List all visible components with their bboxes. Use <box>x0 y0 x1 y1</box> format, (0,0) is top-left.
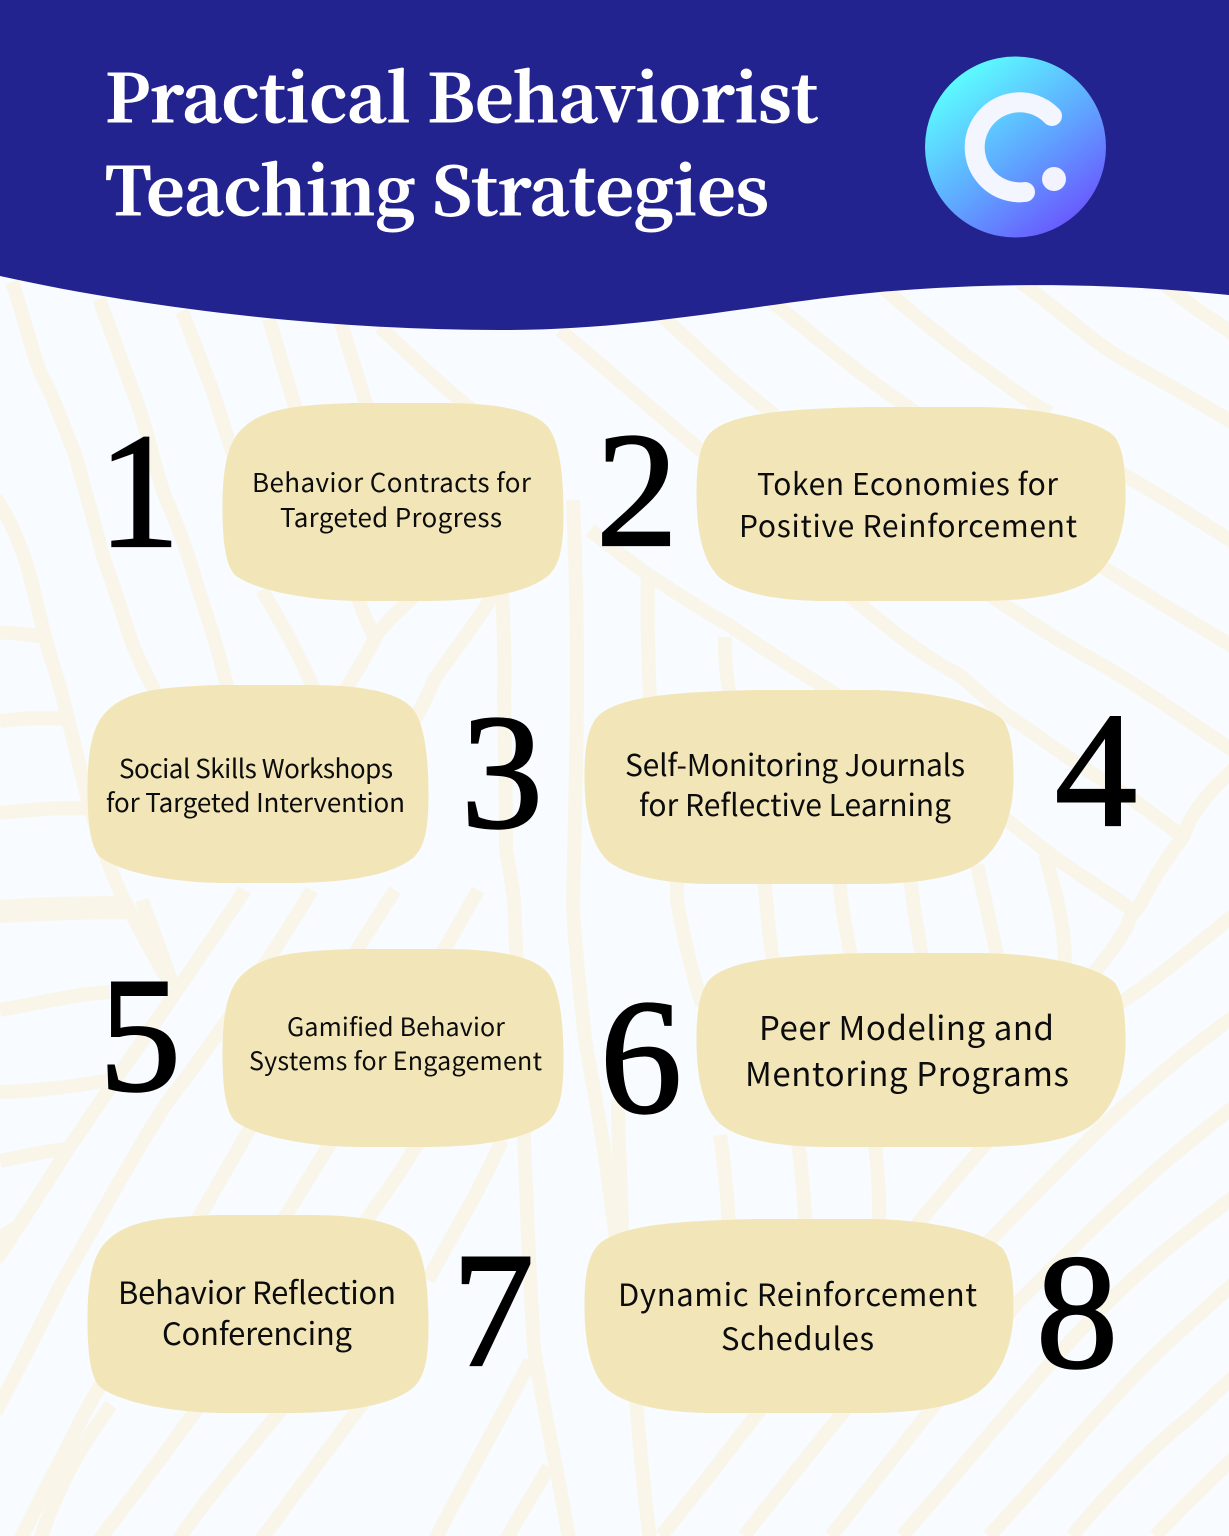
card 8: Dynamic Reinforcement <box>618 1270 977 1315</box>
number 4: 4 <box>1055 680 1137 861</box>
header banner <box>0 0 1229 330</box>
card 7: Behavior Reflection <box>118 1268 396 1313</box>
card 4 <box>584 690 1014 884</box>
card 3: Social Skills Workshops <box>119 749 393 786</box>
item 4 <box>584 680 1137 884</box>
number 3: 3 <box>461 682 543 863</box>
number 5: 5 <box>99 945 181 1126</box>
title: Teaching Strategies <box>105 139 769 234</box>
card 4: Self-Monitoring Journals <box>625 741 965 785</box>
item 7 <box>88 1215 534 1413</box>
card 7: Conferencing <box>162 1309 353 1354</box>
card 7 <box>88 1215 428 1413</box>
card 2: Positive Reinforcement <box>739 502 1077 546</box>
card 6: Mentoring Programs <box>745 1048 1069 1096</box>
card 4: for Reflective Learning <box>639 781 951 825</box>
card 3 <box>88 685 428 883</box>
card 5 <box>222 949 564 1147</box>
number 2: 2 <box>596 400 678 581</box>
number 7: 7 <box>452 1220 534 1401</box>
card 2: Token Economies for <box>757 460 1058 504</box>
number 1: 1 <box>98 401 180 582</box>
card 3: for Targeted Intervention <box>106 783 405 820</box>
item 1 <box>98 401 564 601</box>
card 2 <box>696 407 1126 601</box>
card 8 <box>584 1219 1014 1413</box>
title: Practical Behaviorist <box>105 46 818 141</box>
item 6 <box>600 953 1126 1148</box>
title <box>105 46 818 234</box>
card 5: Systems for Engagement <box>249 1042 543 1078</box>
card 1: Targeted Progress <box>280 498 502 535</box>
card 1 <box>222 403 564 601</box>
card 5: Gamified Behavior <box>287 1008 505 1044</box>
number 6: 6 <box>600 967 682 1148</box>
card 6 <box>696 953 1126 1147</box>
card 8: Schedules <box>721 1314 874 1359</box>
item 5 <box>99 945 564 1147</box>
card 1: Behavior Contracts for <box>252 463 532 500</box>
item 3 <box>88 682 543 883</box>
item 2 <box>596 400 1126 601</box>
item 8 <box>584 1219 1118 1413</box>
number 8: 8 <box>1036 1222 1118 1403</box>
icon: logo <box>925 56 1106 238</box>
card 6: Peer Modeling and <box>759 1002 1054 1050</box>
